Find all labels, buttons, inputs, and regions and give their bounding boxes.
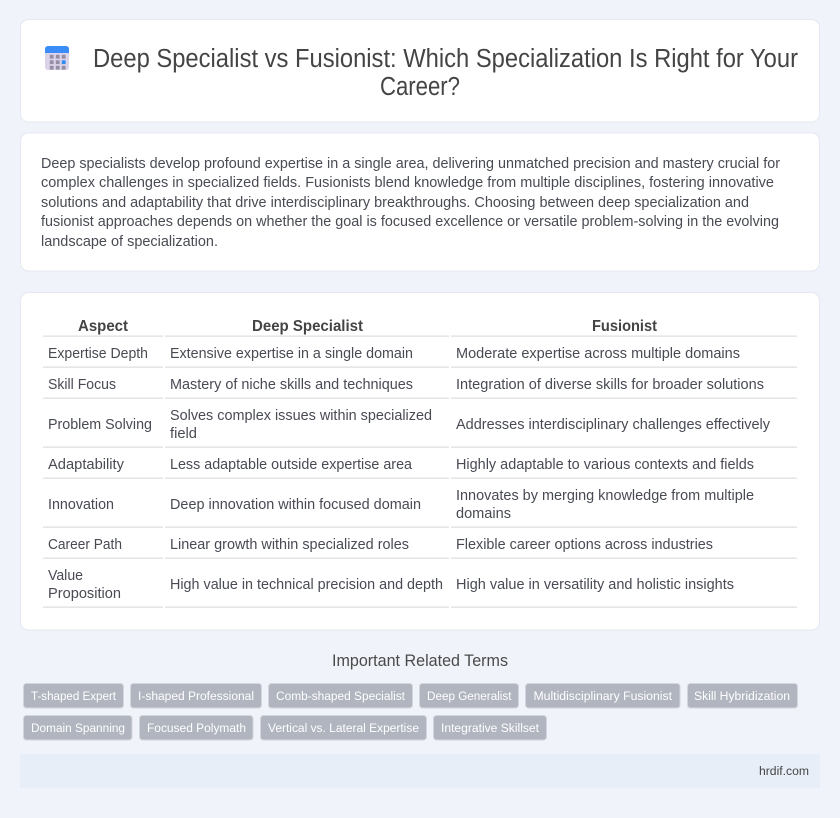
panel: header — [20, 20, 820, 122]
tag: Vertical vs. Lateral Expertise: Vertical vs. Lateral Expertise — [268, 721, 419, 735]
row: problem solving: Problem Solving — [48, 417, 152, 433]
tag: I-shaped Professional — [130, 684, 262, 708]
intro text block: Deep specialists develop profound expertise in a single area, delivering unmatched precision and mastery crucial for — [41, 156, 780, 172]
row: value proposition — [48, 568, 734, 602]
row: innovation: Innovation — [48, 497, 114, 513]
row: expertise depth: Moderate expertise across multiple domains — [456, 346, 740, 362]
tag: Comb-shaped Specialist: Comb-shaped Specialist — [276, 689, 406, 703]
tag: Multidisciplinary Fusionist — [526, 684, 680, 708]
heading: important related terms: Important Related Terms — [332, 652, 508, 670]
row: adaptability — [48, 457, 754, 473]
title — [93, 45, 798, 101]
row: adaptability: Highly adaptable to various contexts and fields — [456, 457, 754, 473]
row: skill focus: Mastery of niche skills and techniques — [170, 377, 413, 393]
intro text block: landscape of specialization. — [41, 234, 218, 250]
icon: calendar grid — [45, 46, 69, 70]
row: problem solving: Solves complex issues within specialized — [170, 408, 432, 424]
tag: Deep Generalist — [420, 684, 518, 708]
row: innovation — [48, 488, 754, 522]
row: value proposition: High value in technical precision and depth — [170, 577, 443, 593]
tag: T-shaped Expert — [24, 684, 124, 708]
row: adaptability: Adaptability — [48, 457, 125, 473]
panel: comparison table — [20, 292, 820, 630]
intro text block: solutions and adaptability that drive interdisciplinary breakthroughs. Choosing between deep specialization and — [41, 195, 749, 211]
row: expertise depth: Extensive expertise in a single domain — [170, 346, 413, 362]
footer site name: hrdif.com — [759, 764, 809, 778]
row: adaptability: Less adaptable outside expertise area — [170, 457, 412, 473]
tag: Comb-shaped Specialist — [268, 684, 412, 708]
row: career path: Flexible career options across industries — [456, 537, 713, 553]
table header row — [78, 318, 658, 335]
tag: T-shaped Expert: T-shaped Expert — [31, 689, 117, 703]
table header row: Aspect — [78, 318, 129, 335]
intro text block — [41, 156, 780, 250]
row: skill focus — [48, 377, 764, 393]
intro text block: complex challenges in specialized fields. Fusionists blend knowledge from multiple disciplines, fostering innovative — [41, 175, 774, 191]
tag: Integrative Skillset — [434, 716, 546, 740]
row: expertise depth: Expertise Depth — [48, 346, 148, 362]
panel: related term tags — [24, 684, 798, 740]
tag: Integrative Skillset: Integrative Skillset — [441, 721, 540, 735]
row: innovation: Deep innovation within focused domain — [170, 497, 421, 513]
row: innovation: Innovates by merging knowledge from multiple — [456, 488, 754, 504]
tag: Focused Polymath: Focused Polymath — [147, 721, 246, 735]
tag: Vertical vs. Lateral Expertise — [260, 716, 426, 740]
row: problem solving: Addresses interdisciplinary challenges effectively — [456, 417, 771, 433]
row: skill focus: Integration of diverse skills for broader solutions — [456, 377, 764, 393]
row: value proposition: Value — [48, 568, 83, 584]
tag: Domain Spanning: Domain Spanning — [31, 721, 125, 735]
intro text block: fusionist approaches depends on whether the goal is focused excellence or versatile problem-solving in the evolving — [41, 214, 779, 230]
tag: Deep Generalist: Deep Generalist — [427, 689, 512, 703]
row: value proposition: Proposition — [48, 586, 121, 602]
row: problem solving: field — [170, 426, 197, 442]
table header row: Deep Specialist — [252, 318, 364, 335]
row: innovation: domains — [456, 506, 511, 522]
row: expertise depth — [48, 346, 740, 362]
title: Deep Specialist vs Fusionist: Which Specialization Is Right for Your — [93, 45, 798, 73]
row: skill focus: Skill Focus — [48, 377, 116, 393]
table header row: Fusionist — [592, 318, 658, 335]
tag: I-shaped Professional: I-shaped Professional — [138, 689, 254, 703]
row: problem solving — [48, 408, 771, 442]
row: career path: Career Path — [48, 537, 122, 553]
footer — [20, 754, 820, 788]
row: career path — [48, 537, 713, 553]
row: career path: Linear growth within specialized roles — [170, 537, 409, 553]
row: value proposition: High value in versatility and holistic insights — [456, 577, 734, 593]
tag: Multidisciplinary Fusionist: Multidisciplinary Fusionist — [534, 689, 673, 703]
tag: Focused Polymath — [140, 716, 253, 740]
tag: Skill Hybridization: Skill Hybridization — [694, 689, 790, 703]
title: Career? — [380, 73, 460, 101]
tag: Skill Hybridization — [688, 684, 798, 708]
tag: Domain Spanning — [24, 716, 132, 740]
panel: introduction — [20, 133, 820, 271]
